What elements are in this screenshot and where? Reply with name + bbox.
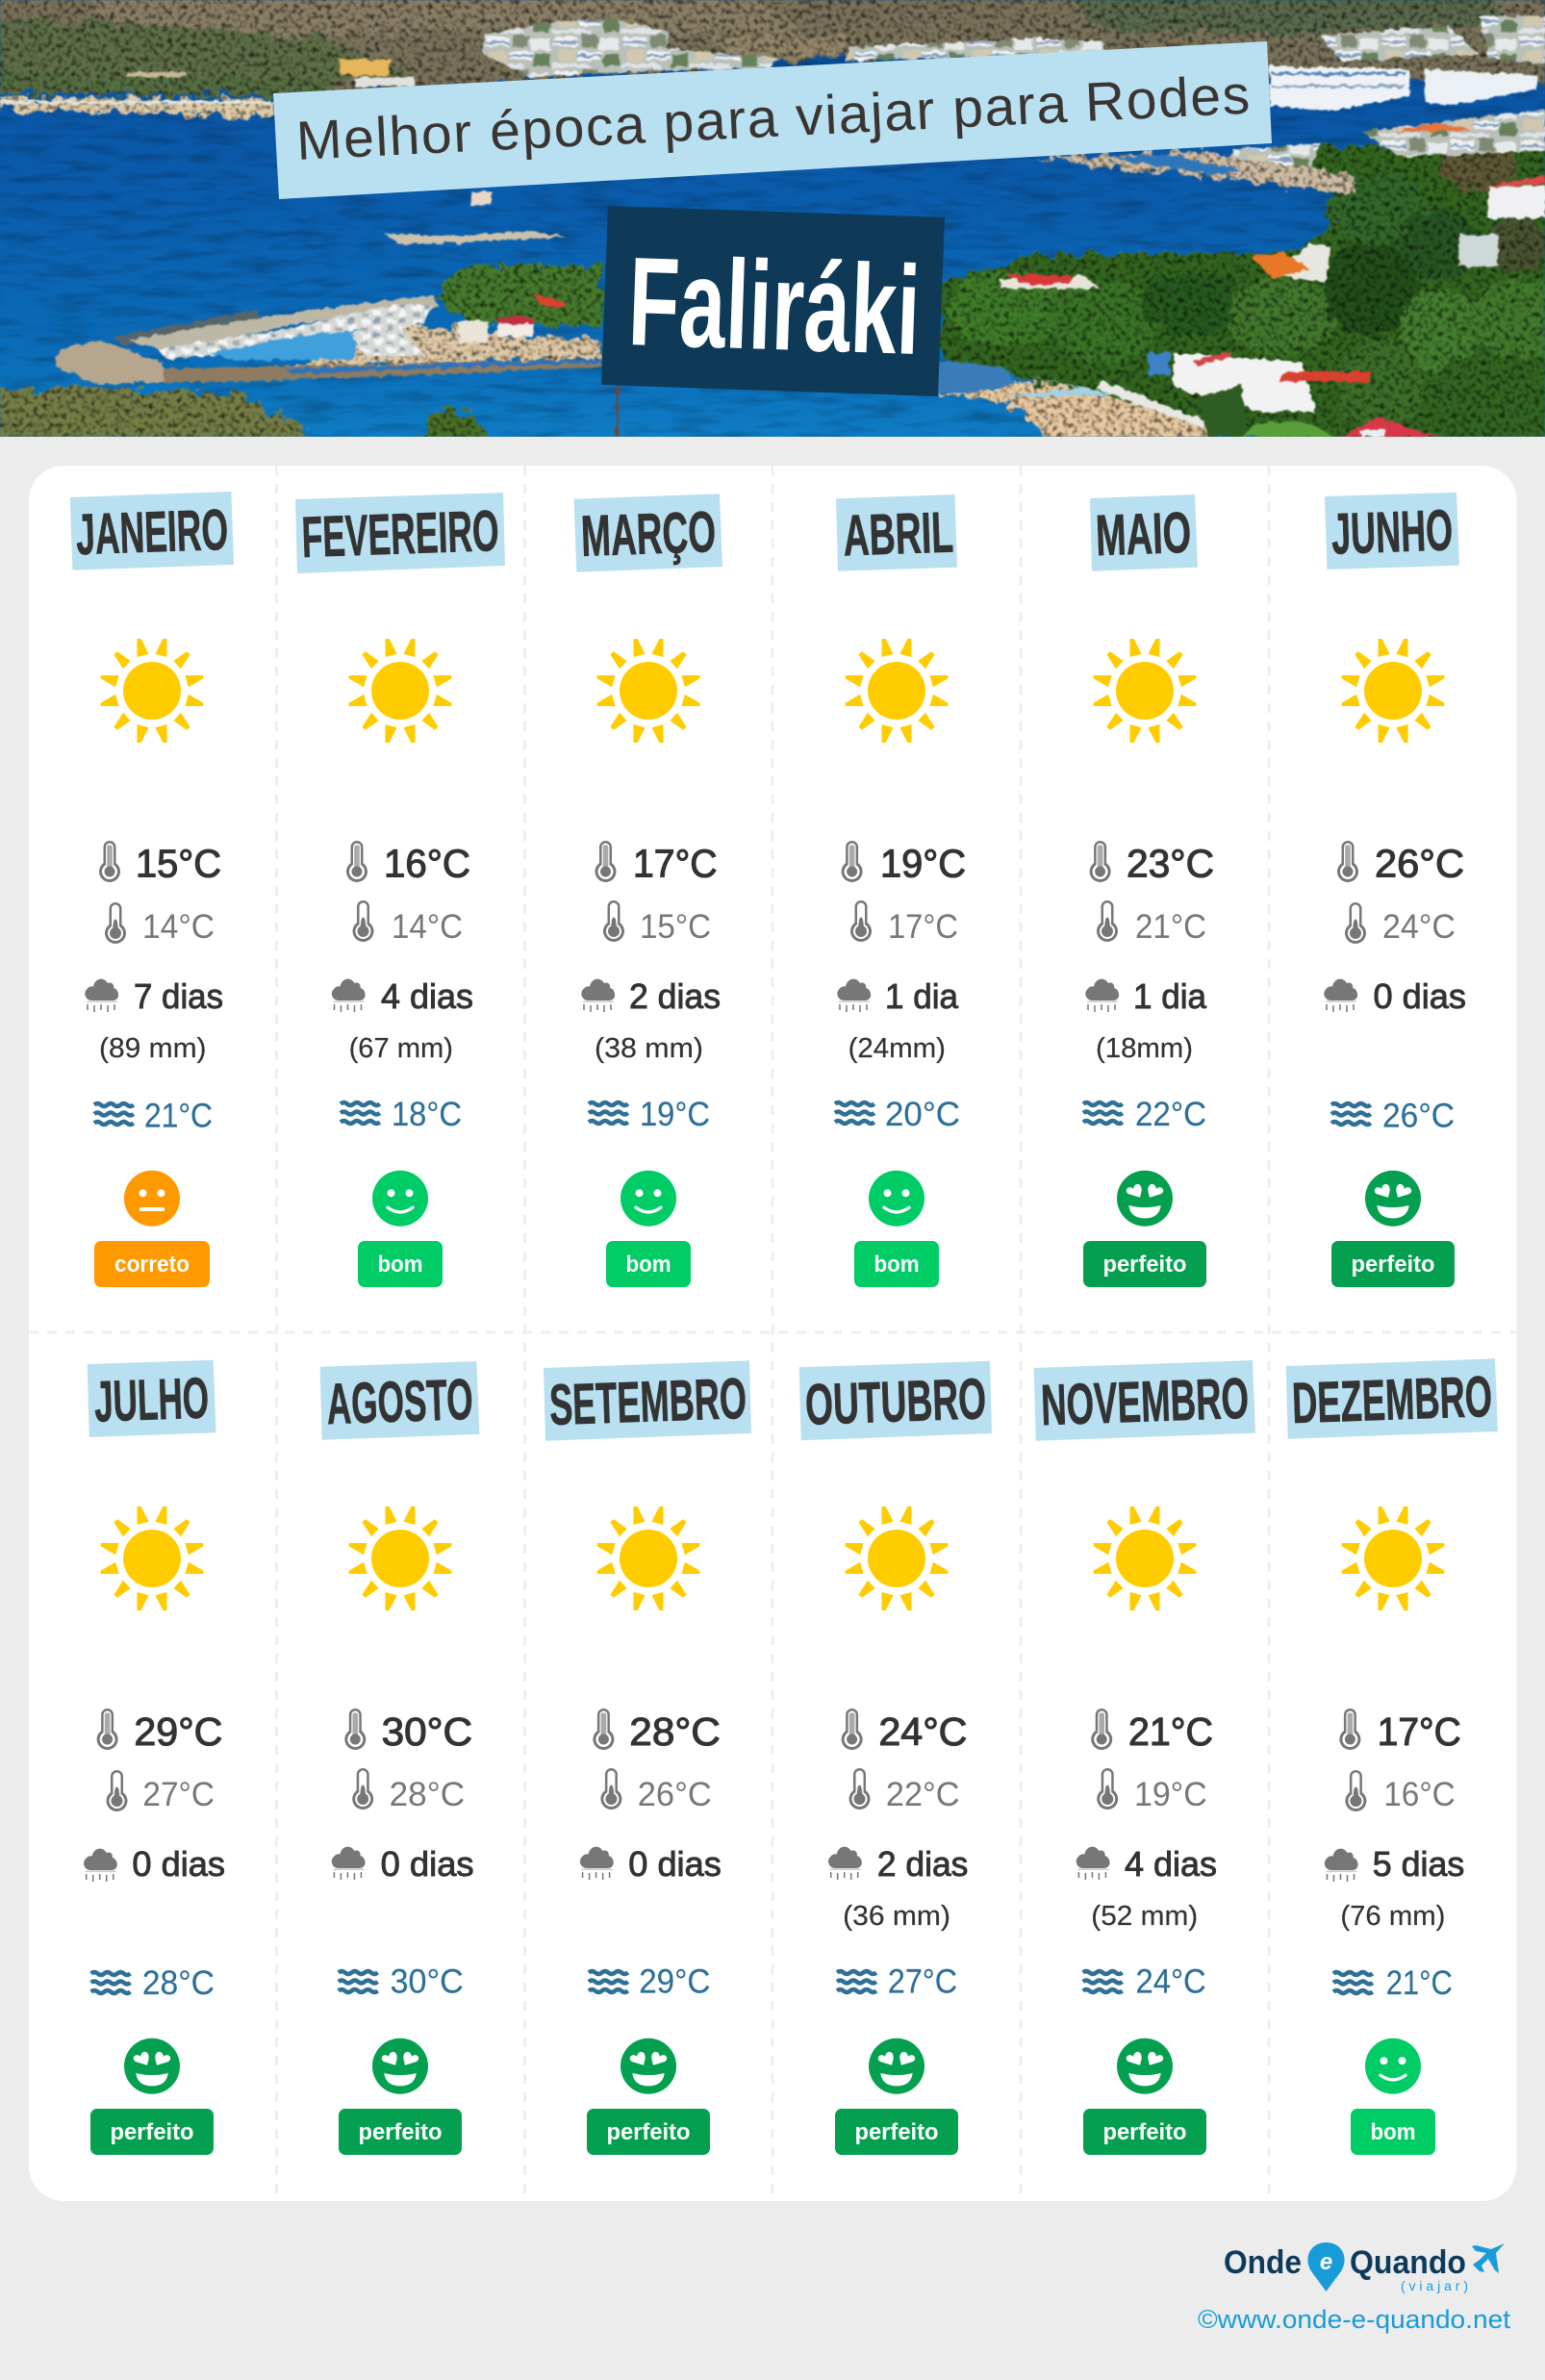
rating: bom (358, 1171, 443, 1287)
low temperature: 14°C (142, 908, 215, 946)
low temperature: 15°C (640, 908, 711, 946)
icon: sun (1094, 639, 1196, 743)
rating: perfeito: perfeito (854, 2119, 939, 2145)
rating: bom: bom (625, 1252, 671, 1278)
rating: perfeito (339, 2038, 462, 2155)
rain (1324, 976, 1466, 1016)
sea temperature: 28°C (142, 1964, 215, 2002)
low temperature: 28°C (390, 1776, 465, 1813)
rating: perfeito: perfeito (1102, 1252, 1187, 1278)
icon: sun (597, 1506, 699, 1610)
rain: 0 dias (628, 1844, 722, 1884)
rating: perfeito (587, 2038, 710, 2155)
month label: fevereiro (295, 493, 505, 573)
rain: 5 dias (1373, 1844, 1464, 1884)
rating: perfeito: perfeito (1102, 2119, 1187, 2145)
rating: bom: bom (874, 1252, 920, 1278)
rating: perfeito: perfeito (1351, 1252, 1435, 1278)
icon: map pin: e (1320, 2249, 1332, 2275)
rating: perfeito (835, 2038, 958, 2155)
low temperature: 22°C (886, 1776, 960, 1813)
high temperature (344, 1709, 472, 1754)
month label: junho: JUNHO (1330, 497, 1454, 567)
month label: janeiro (70, 492, 234, 570)
logo: Onde e Quando viajar: (viajar) (1401, 2278, 1468, 2293)
high temperature (842, 841, 966, 886)
month label: abril: ABRIL (842, 499, 954, 568)
low temperature (106, 1770, 215, 1813)
rating: perfeito (1331, 1171, 1455, 1287)
low temperature (352, 1768, 465, 1813)
panel: agosto (320, 1361, 479, 2155)
high temperature: 17°C (1378, 1709, 1461, 1754)
sea temperature: 21°C (144, 1098, 213, 1135)
panel: junho (1324, 493, 1466, 1287)
month label: setembro: SETEMBRO (548, 1366, 747, 1437)
sea temperature (1083, 1096, 1206, 1133)
sea temperature: 21°C (1386, 1964, 1453, 2002)
panel: março (574, 494, 722, 1287)
icon: sun (1342, 1506, 1444, 1610)
month label: julho (88, 1360, 216, 1437)
icon: sun (846, 1506, 948, 1610)
high temperature (346, 841, 470, 886)
title banner (273, 41, 1272, 199)
low temperature (600, 1768, 712, 1813)
rain (1076, 1844, 1217, 1932)
sea temperature: 22°C (1135, 1096, 1206, 1133)
rain (580, 1844, 722, 1884)
sea temperature (1083, 1963, 1206, 2001)
high temperature: 23°C (1127, 842, 1214, 886)
high temperature: 28°C (629, 1709, 721, 1754)
month label: outubro: OUTUBRO (804, 1366, 987, 1437)
month label: junho (1325, 493, 1459, 570)
sea temperature (341, 1096, 462, 1133)
logo: Onde e Quando viajar: Onde (1224, 2244, 1302, 2281)
month label: novembro: NOVEMBRO (1040, 1366, 1250, 1437)
high temperature: 16°C (384, 842, 470, 886)
rating: correto (94, 1171, 210, 1287)
high temperature: 17°C (633, 842, 718, 886)
high temperature (1090, 841, 1214, 886)
high temperature (1337, 841, 1464, 886)
low temperature (850, 900, 958, 946)
sea temperature: 19°C (640, 1096, 710, 1133)
high temperature: 21°C (1128, 1709, 1213, 1754)
rating: bom: bom (377, 1252, 423, 1278)
month label: maio (1090, 494, 1198, 571)
rating: perfeito: perfeito (606, 2119, 691, 2145)
rain (581, 976, 721, 1064)
panel: fevereiro (295, 493, 505, 1287)
rain: 0 dias (381, 1844, 474, 1884)
website url: ©www.onde-e-quando.net (1198, 2305, 1511, 2334)
icon: airplane (1472, 2243, 1505, 2273)
month label: agosto (320, 1361, 479, 1440)
logo: Onde e Quando viajar (1224, 2242, 1505, 2293)
rating: perfeito (1083, 2038, 1206, 2155)
month label: maio: MAIO (1095, 500, 1192, 568)
sea temperature: 30°C (391, 1963, 464, 2001)
high temperature (99, 841, 221, 886)
month label: janeiro: JANEIRO (75, 497, 229, 567)
low temperature (352, 900, 463, 946)
sea temperature (1331, 1098, 1455, 1135)
rating: perfeito (90, 2038, 214, 2155)
title banner: Melhor época para viajar para Rodes (295, 64, 1251, 172)
low temperature (603, 900, 711, 946)
sea temperature (589, 1096, 710, 1133)
panel: abril (835, 494, 966, 1287)
high temperature: 29°C (134, 1709, 222, 1754)
rating: perfeito (1083, 1171, 1206, 1287)
rain (332, 976, 473, 1064)
rain: 2 dias (877, 1844, 968, 1884)
low temperature (1345, 1770, 1456, 1813)
rain: (38 mm) (595, 1033, 703, 1064)
month label: novembro (1034, 1360, 1255, 1441)
panel: monthly climate card (29, 466, 1516, 2201)
rain: 1 dia (1133, 976, 1207, 1016)
rain: (52 mm) (1091, 1901, 1198, 1932)
high temperature: 19°C (880, 842, 966, 886)
rating: bom (606, 1171, 691, 1287)
low temperature (1345, 902, 1456, 946)
high temperature: 26°C (1375, 842, 1464, 886)
month label: abril (836, 494, 957, 571)
sea temperature (835, 1096, 960, 1133)
icon: sun (349, 1506, 451, 1610)
panel: maio (1083, 494, 1214, 1287)
logo: Onde e Quando viajar: Quando (1350, 2244, 1466, 2281)
month label: março: MARÇO (580, 499, 717, 569)
icon: sun (101, 1506, 203, 1610)
sea temperature (91, 1964, 215, 2002)
rain: (18mm) (1096, 1033, 1193, 1064)
high temperature: 24°C (878, 1709, 967, 1754)
high temperature (595, 841, 718, 886)
sea temperature (837, 1963, 957, 2001)
rating: bom (1351, 2038, 1435, 2155)
rain: 0 dias (132, 1844, 225, 1884)
high temperature: 15°C (136, 842, 221, 886)
icon: map pin (1307, 2242, 1345, 2291)
rain: 2 dias (629, 976, 721, 1016)
destination heading: Faliráki (626, 230, 923, 381)
month label: outubro (799, 1361, 992, 1440)
low temperature: 17°C (888, 908, 958, 946)
low temperature (105, 902, 215, 946)
rating: correto: correto (114, 1252, 190, 1278)
rain: 0 dias (1374, 976, 1466, 1016)
high temperature (97, 1709, 222, 1754)
rain (1325, 1844, 1464, 1932)
rain: 7 dias (134, 976, 223, 1016)
icon: sun (846, 639, 948, 743)
rating: perfeito: perfeito (110, 2119, 194, 2145)
rain: (67 mm) (349, 1033, 453, 1064)
sea temperature: 27°C (888, 1963, 957, 2001)
low temperature (1097, 900, 1206, 946)
sea temperature: 24°C (1135, 1963, 1206, 2001)
sea temperature: 29°C (639, 1963, 710, 2001)
rain: (24mm) (848, 1033, 946, 1064)
high temperature: 30°C (382, 1709, 472, 1754)
low temperature: 24°C (1382, 908, 1456, 946)
rain (828, 1844, 968, 1932)
panel: janeiro (70, 492, 234, 1287)
low temperature: 14°C (392, 908, 463, 946)
panel: setembro (544, 1360, 751, 2155)
month label: julho: JULHO (93, 1365, 210, 1434)
icon: sun (597, 639, 699, 743)
sea temperature (94, 1098, 213, 1135)
sea temperature (1333, 1964, 1453, 2002)
rain: (89 mm) (99, 1033, 206, 1064)
low temperature: 19°C (1134, 1776, 1207, 1813)
icon: sun (101, 639, 203, 743)
rain: (36 mm) (843, 1901, 950, 1932)
low temperature (1097, 1768, 1207, 1813)
high temperature (1091, 1709, 1213, 1754)
low temperature: 26°C (638, 1776, 712, 1813)
rain (84, 1844, 225, 1884)
month label: setembro (544, 1360, 751, 1441)
month label: fevereiro: FEVEREIRO (300, 498, 500, 570)
rating: bom (854, 1171, 939, 1287)
rain (837, 976, 959, 1064)
panel: novembro (1034, 1360, 1255, 2155)
sea temperature: 26°C (1382, 1098, 1455, 1135)
rating: bom: bom (1370, 2119, 1416, 2145)
rain (332, 1844, 474, 1884)
rain (1085, 976, 1207, 1064)
icon: sun (349, 639, 451, 743)
high temperature (842, 1709, 967, 1754)
destination heading (601, 206, 945, 396)
sea temperature: 18°C (392, 1096, 462, 1133)
icon: sun (1342, 639, 1444, 743)
rain: 1 dia (885, 976, 959, 1016)
month label: agosto: AGOSTO (326, 1367, 474, 1436)
header photo: coastal view of Faliraki (0, 0, 1545, 466)
month label: março (574, 494, 722, 572)
icon: sun (1094, 1506, 1196, 1610)
panel: dezembro (1286, 1358, 1498, 2155)
rain: 4 dias (1125, 1844, 1217, 1884)
sea temperature: 20°C (885, 1096, 960, 1133)
low temperature: 16°C (1383, 1776, 1456, 1813)
low temperature: 27°C (142, 1776, 215, 1813)
panel: julho (84, 1360, 225, 2155)
low temperature: 21°C (1135, 908, 1206, 946)
sea temperature (339, 1963, 464, 2001)
rain: 4 dias (381, 976, 473, 1016)
rating: perfeito: perfeito (358, 2119, 443, 2145)
low temperature (848, 1768, 960, 1813)
high temperature (1339, 1709, 1461, 1754)
high temperature (593, 1709, 721, 1754)
rain: (76 mm) (1340, 1901, 1445, 1932)
rain (85, 976, 223, 1064)
sea temperature (589, 1963, 710, 2001)
panel: outubro (799, 1361, 992, 2155)
